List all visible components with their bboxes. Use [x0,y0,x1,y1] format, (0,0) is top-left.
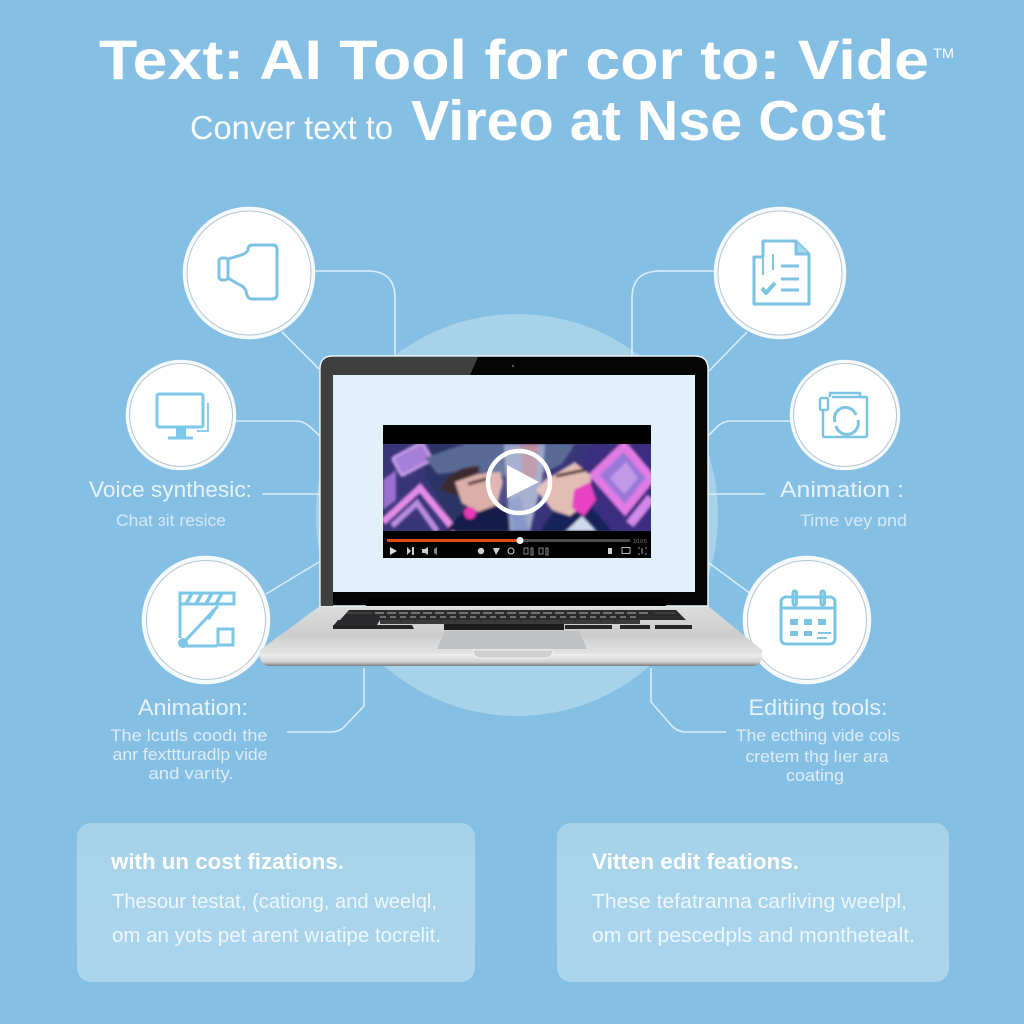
label: animation left [110,695,268,783]
label: voice synthesis: Chat ɜit resice [116,512,226,530]
panel: edit features [557,823,949,982]
laptop lid [320,356,708,606]
label: animation right [780,477,907,530]
connector lines [236,271,790,732]
label: editing tools: The ecthing vide cols [736,727,900,745]
video player [383,425,651,558]
panel text: Thesour testat, (cationg, and weelql, [112,891,437,913]
subtitle: Conver text to [190,109,393,146]
play button [488,451,550,513]
icon circle: bottom right [745,558,869,682]
icon circle: top right [716,209,844,337]
progress bar [387,537,647,545]
laptop base [260,606,762,666]
subtitle [190,89,886,153]
label: animation right: Animation : [780,477,904,502]
label: animation left: Animation: [138,695,248,720]
icon circle: bottom left [144,558,268,682]
icon: calendar [781,591,835,644]
subtitle: Vireo at Nse Cost [411,89,886,153]
icon circle: middle left [128,362,234,468]
panel text [592,891,915,947]
video frame [383,442,651,531]
label: animation right: Time vey ɒnd [800,512,907,530]
panel heading: with un cost fizations. [110,849,344,874]
panel heading: Vitten edit feations. [592,849,799,874]
icon circle: middle right [792,362,898,468]
laptop screen [333,375,695,592]
panel text [112,891,441,947]
label: voice synthesis: Voice synthesic: [89,477,252,502]
icon: document checklist [754,241,809,304]
progress bar: 2/10:5 [633,539,647,545]
label: animation left: anr fexttturadlp vide [112,746,268,764]
icon: camera [219,245,277,299]
title: Text: AI Tool for cor to: Vide [99,28,929,91]
player controls [390,547,647,555]
icon circle: top left [185,209,313,337]
panel text: These tefatranna carliving weelpl, [592,891,907,913]
icon: monitor [157,394,208,438]
title: TM [933,45,954,61]
label: voice synthesis [89,477,252,530]
label: editing tools: coating [786,767,844,785]
panel text: om an yots pet arent wıatipe tocrelit. [112,925,441,947]
label: animation left: The lcutls coodı the [110,727,268,745]
label: editing tools [736,695,900,785]
panel: cost features [77,823,475,982]
laptop [260,356,762,666]
icon: refresh clipboard [820,393,867,437]
keyboard [333,610,692,630]
icon: clapperboard [180,593,234,646]
label: editing tools: Editiing tools: [748,695,888,720]
label: animation left: and varıty. [148,765,234,783]
panel text: om ort pescedpls and monthetealt. [592,925,915,947]
label: editing tools: cretem thg lıer ara [746,748,889,766]
central glow circle [316,314,718,716]
